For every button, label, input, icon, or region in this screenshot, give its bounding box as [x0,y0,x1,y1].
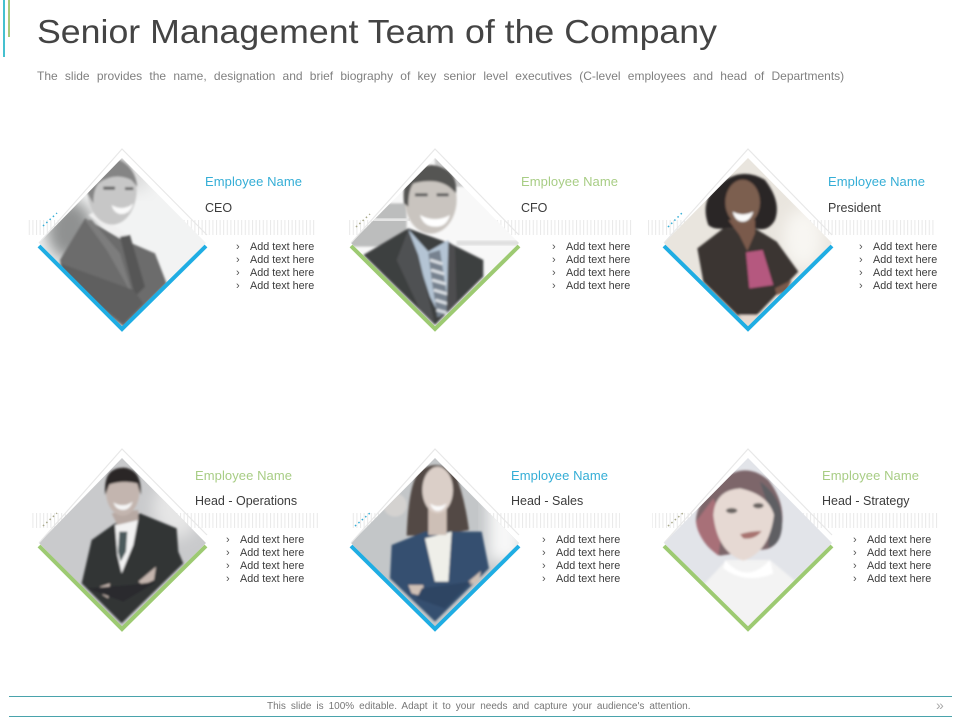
bullets: CEO: Add text here [250,241,314,253]
icon: double chevron: » [936,697,944,713]
accent bars [3,0,10,57]
name: CEO: Employee Name [205,174,302,189]
panel: CFO [349,148,631,332]
photo: CFO [351,158,519,326]
bullets: CEO: Add text here [250,254,314,266]
panel: President [648,145,937,345]
bullets: Sales [542,534,620,585]
accent V: Operations [39,546,206,629]
bullets: Strategy: Add text here [867,573,931,585]
hatch band: President [648,220,936,235]
accent V: Sales [351,546,519,629]
panel: CEO [28,148,314,332]
role: Strategy: Head - Strategy [822,494,910,508]
hatch band: Sales [352,513,620,528]
bullets: Sales: › [542,573,546,585]
bullets: Operations: › [226,547,230,559]
bullets: Sales: › [542,547,546,559]
bullets: Strategy: › [853,573,857,585]
bullets: Strategy: › [853,560,857,572]
bullets: CFO [552,241,630,292]
footer bar [9,696,952,717]
bullets: President: › [859,267,863,279]
bullets: Operations: Add text here [240,547,304,559]
role: President: President [828,201,881,215]
photo: Sales [351,458,519,626]
bullets: Operations: › [226,573,230,585]
bullets: CEO: Add text here [250,280,314,292]
footer text: This slide is 100% editable. Adapt it to your needs and capture your audience's attention. [267,701,691,712]
name: Operations: Employee Name [195,468,292,483]
diamond frame: President [664,149,832,243]
accent V: CEO [39,246,206,329]
hatch band: Operations [31,513,318,528]
role: CEO: CEO [205,201,232,215]
bullets: Sales: › [542,534,546,546]
diamond frame: Sales [351,449,519,543]
accent V: CFO [351,246,519,329]
panel: Head - Operations [30,445,318,645]
bullets: Strategy: › [853,547,857,559]
bullets: CFO: › [552,280,556,292]
bullets: CFO: Add text here [566,267,630,279]
name: CFO: Employee Name [521,174,618,189]
bullets: Strategy: Add text here [867,534,931,546]
bullets: CEO: Add text here [250,267,314,279]
panel: Head - Sales [345,445,620,645]
role: CFO: CFO [521,201,548,215]
accent V: President [664,246,832,329]
bullets: CEO: › [236,241,240,253]
subtitle: The slide provides the name, designation and brief biography of key senior level executives (C-level employees and head of Departments) [37,69,844,83]
bullets: Strategy: Add text here [867,560,931,572]
bullets: CFO: › [552,267,556,279]
bullets: Sales: › [542,560,546,572]
bullets: Operations [226,534,304,585]
role: Operations: Head - Operations [195,494,297,508]
bullets: Strategy [853,534,931,585]
name: President: Employee Name [828,174,925,189]
bullets: CEO: › [236,267,240,279]
bullets: Operations: Add text here [240,560,304,572]
bullets: President: Add text here [873,267,937,279]
diamond frame: Strategy [664,449,832,543]
bullets: Sales: Add text here [556,573,620,585]
bullets: CEO [236,241,314,292]
bullets: President: Add text here [873,254,937,266]
bullets: Strategy: Add text here [867,547,931,559]
dots: Operations [43,513,57,526]
bullets: Operations: › [226,560,230,572]
bullets: Sales: Add text here [556,534,620,546]
bullets: President [859,241,937,292]
photo: CEO [40,158,206,326]
hatch band: CEO [28,220,315,235]
photo: Operations [39,458,206,626]
name: Strategy: Employee Name [822,468,919,483]
bullets: CFO: › [552,254,556,266]
bullets: CEO: › [236,280,240,292]
dots: Sales [355,513,370,526]
bullets: President: › [859,254,863,266]
role: Sales: Head - Sales [511,494,583,508]
bullets: Operations: › [226,534,230,546]
title: Senior Management Team of the Company [37,13,718,50]
dots: CFO [356,214,370,227]
bullets: CFO: Add text here [566,254,630,266]
photo: President [664,158,832,326]
bullets: President: › [859,280,863,292]
hatch band: Strategy [652,513,938,528]
accent V: Strategy [664,546,832,629]
bullets: CFO: Add text here [566,280,630,292]
diamond frame: CEO [39,149,207,243]
dots: President [668,212,683,227]
bullets: Sales: Add text here [556,547,620,559]
bullets: CEO: › [236,254,240,266]
bullets: CFO: Add text here [566,241,630,253]
bullets: CFO: › [552,241,556,253]
dots: Strategy [668,513,683,526]
bullets: Sales: Add text here [556,560,620,572]
bullets: President: › [859,241,863,253]
diamond frame: Operations [39,449,207,543]
bullets: Strategy: › [853,534,857,546]
dots: CEO [43,213,57,226]
photo: Strategy [664,458,832,626]
bullets: Operations: Add text here [240,534,304,546]
name: Sales: Employee Name [511,468,608,483]
panel: Head - Strategy [652,445,938,645]
diamond frame: CFO [351,149,519,243]
hatch band: CFO [348,220,632,235]
bullets: Operations: Add text here [240,573,304,585]
bullets: President: Add text here [873,280,937,292]
bullets: President: Add text here [873,241,937,253]
